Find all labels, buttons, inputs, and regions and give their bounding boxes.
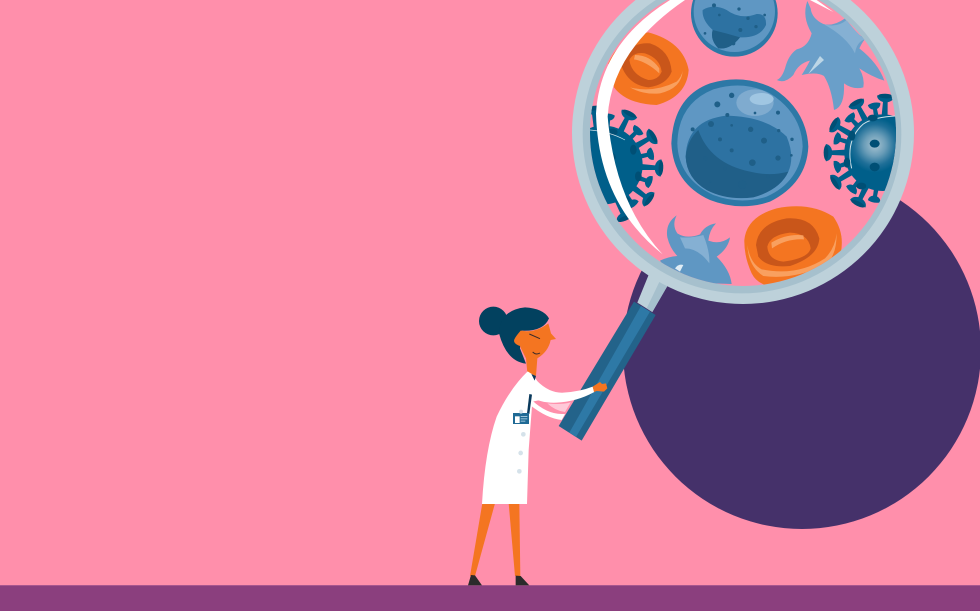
- right virus: [824, 94, 896, 208]
- lens rim: [572, 0, 914, 304]
- magnifying glass handle: [559, 263, 677, 441]
- glare streak top right: [810, 0, 833, 12]
- top right amoeboid cell: [777, 1, 884, 110]
- glass glare: [596, 0, 685, 254]
- large central white blood cell: [671, 79, 808, 206]
- magnifying glass lens: [564, 0, 921, 304]
- id badge: [513, 413, 529, 424]
- top orange blood cell: [608, 32, 689, 105]
- coat buttons: [517, 410, 526, 474]
- bottom amoeboid cell: [660, 215, 732, 284]
- face and neck: [514, 323, 556, 376]
- shoes: [468, 575, 529, 585]
- far arm: [530, 400, 565, 420]
- legs: [470, 503, 520, 576]
- collar and lanyard: [527, 374, 536, 414]
- hand: [593, 382, 607, 392]
- ground strip: [0, 585, 980, 611]
- bottom orange blood cell: [744, 206, 842, 288]
- hair: [479, 307, 549, 364]
- scientist: [468, 307, 607, 585]
- lens contents: [590, 0, 896, 284]
- top round cell: [691, 0, 778, 57]
- left virus: [590, 106, 664, 222]
- near arm: [532, 376, 594, 403]
- facial features: [529, 334, 540, 354]
- pink sleeve lining: [547, 402, 571, 412]
- white coat: [482, 371, 548, 504]
- purple circle: [623, 171, 980, 529]
